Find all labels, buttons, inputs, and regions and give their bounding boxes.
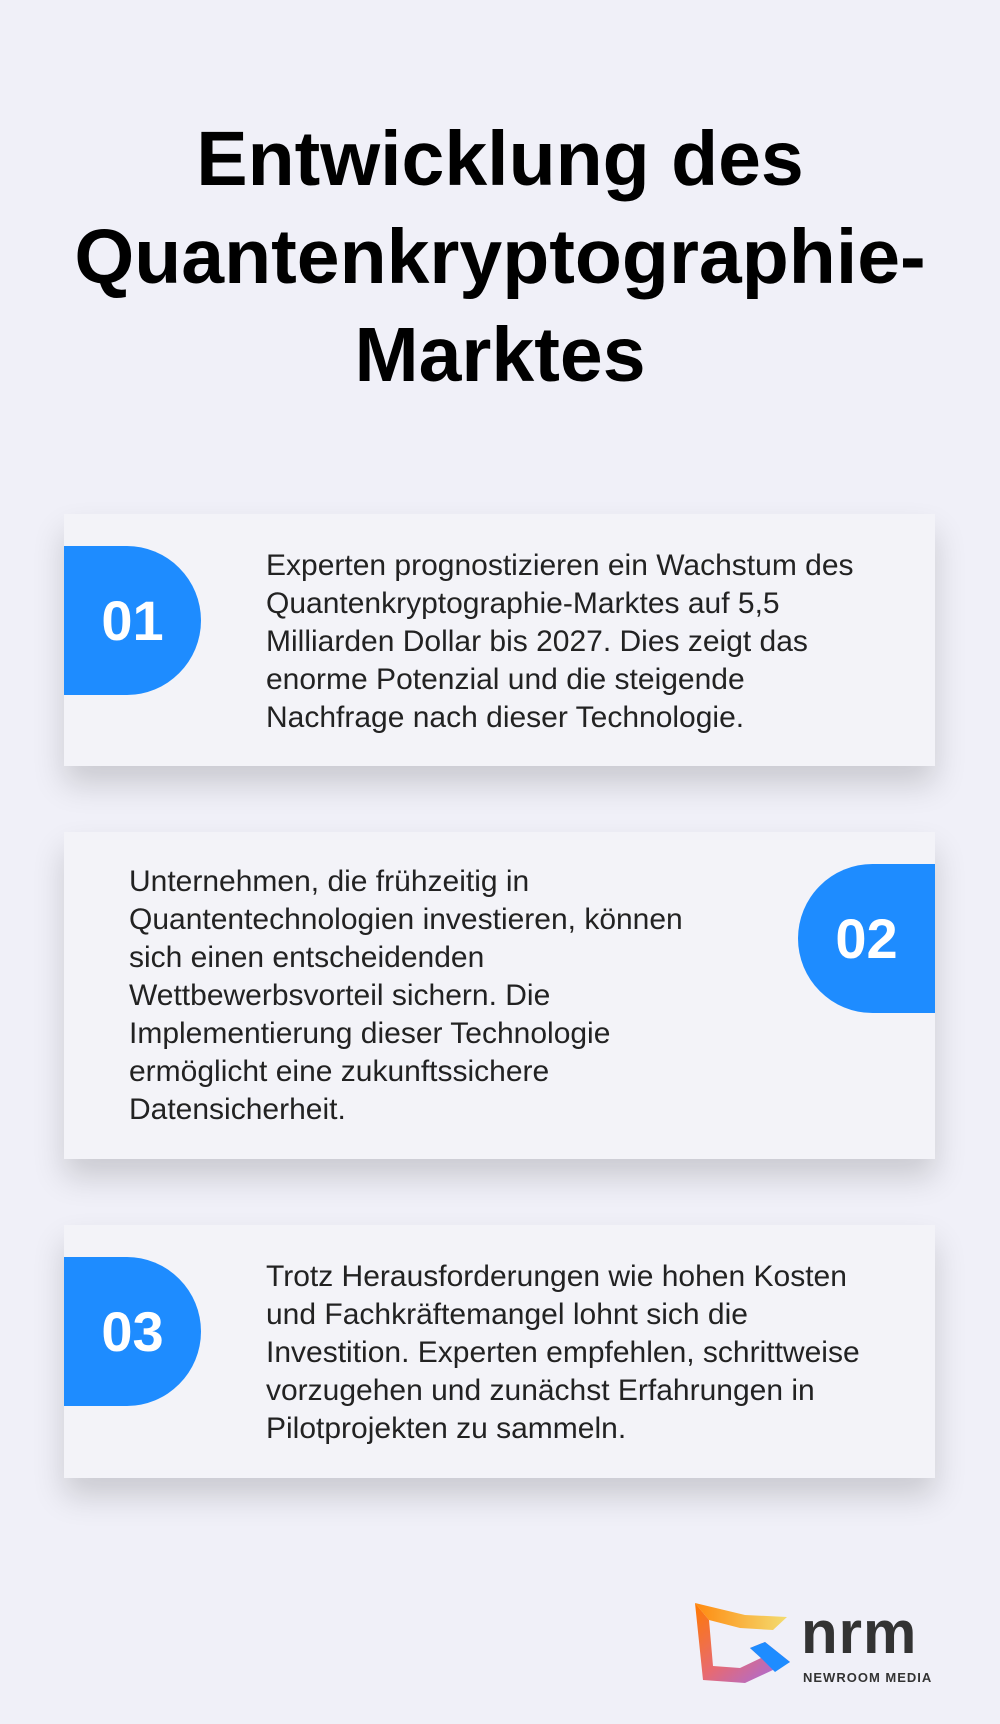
text 3: vorzugehen und zunächst Erfahrungen in	[266, 1374, 815, 1407]
icon: logo mark	[695, 1603, 790, 1683]
badge 02	[798, 864, 935, 1013]
text 3: Investition. Experten empfehlen, schrittweise	[266, 1336, 860, 1369]
badge 01	[64, 546, 201, 695]
text 3	[266, 1260, 860, 1445]
panel: card 1	[64, 514, 935, 766]
panel: card 3	[64, 1225, 935, 1478]
text 2: Wettbewerbsvorteil sichern. Die	[129, 979, 550, 1012]
text 1: Quantenkryptographie-Marktes auf 5,5	[266, 587, 780, 620]
title: Quantenkryptographie-	[74, 214, 926, 300]
panel: card 2	[64, 832, 935, 1159]
text 2: Quantentechnologien investieren, können	[129, 903, 683, 936]
logo	[695, 1599, 932, 1685]
badge 03: 03	[101, 1300, 164, 1363]
badge 01: 01	[101, 589, 164, 652]
text 2: sich einen entscheidenden	[129, 941, 484, 974]
logo text: nrm	[801, 1599, 917, 1666]
logo: NEWROOM MEDIA	[803, 1670, 932, 1685]
text 1: Nachfrage nach dieser Technologie.	[266, 701, 744, 734]
text 1: Experten prognostizieren ein Wachstum des	[266, 549, 854, 582]
badge 02: 02	[835, 907, 898, 970]
title	[74, 116, 926, 398]
text 2: Implementierung dieser Technologie	[129, 1017, 610, 1050]
text 2: ermöglicht eine zukunftssichere	[129, 1055, 549, 1088]
title: Marktes	[354, 312, 646, 398]
title: Entwicklung des	[196, 116, 804, 202]
text 3: und Fachkräftemangel lohnt sich die	[266, 1298, 748, 1331]
text 1: Milliarden Dollar bis 2027. Dies zeigt das	[266, 625, 808, 658]
text 2	[129, 865, 683, 1126]
text 2: Unternehmen, die frühzeitig in	[129, 865, 529, 898]
text 3: Pilotprojekten zu sammeln.	[266, 1412, 626, 1445]
badge 03	[64, 1257, 201, 1406]
text 1: enorme Potenzial und die steigende	[266, 663, 745, 696]
text 1	[266, 549, 854, 734]
text 3: Trotz Herausforderungen wie hohen Kosten	[266, 1260, 847, 1293]
text 2: Datensicherheit.	[129, 1093, 346, 1126]
